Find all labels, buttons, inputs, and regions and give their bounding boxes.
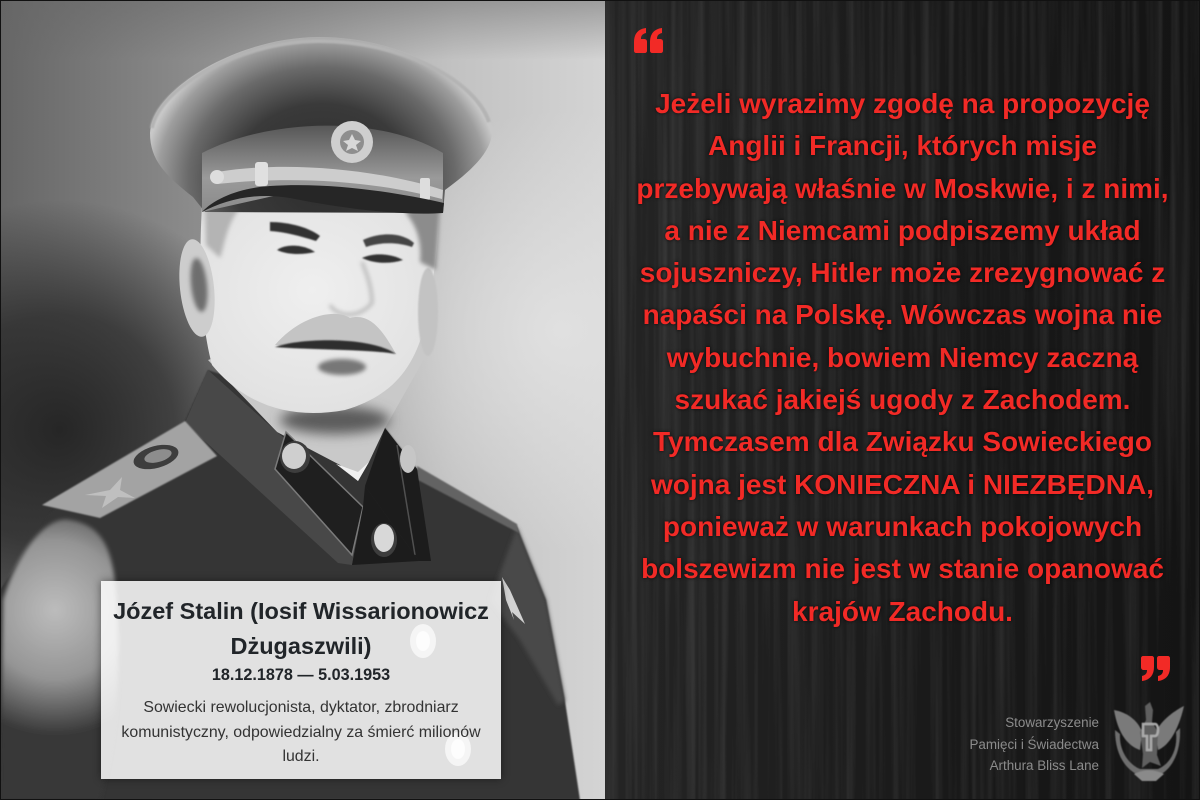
quote text: Anglii i Francji, których misje	[708, 130, 1097, 161]
card heading: name	[113, 598, 489, 659]
icon: closing quotation mark	[1141, 656, 1170, 681]
neck	[208, 330, 432, 481]
quote text: bolszewizm nie jest w stanie opanować	[641, 553, 1164, 584]
quote text: przebywają właśnie w Moskwie, i z nimi,	[636, 173, 1169, 204]
quote text: wojna jest KONIECZNA i NIEZBĘDNA,	[651, 469, 1154, 500]
quote text: szukać jakiejś ugody z Zachodem.	[675, 384, 1130, 415]
face	[175, 190, 440, 413]
coat buttons	[280, 441, 525, 766]
card description: ludzi.	[282, 748, 320, 765]
panel: portrait photograph	[1, 1, 605, 799]
epaulette	[42, 421, 217, 518]
background tone	[0, 0, 605, 800]
icon: eagle emblem	[1114, 702, 1184, 782]
quote text: a nie z Niemcami podpiszemy układ	[664, 215, 1141, 246]
quote text: wybuchnie, bowiem Niemcy zaczną	[667, 342, 1138, 373]
quote text: Jeżeli wyrazimy zgodę na propozycję	[655, 88, 1150, 119]
quote text: sojuszniczy, Hitler może zrezygnować z	[640, 257, 1165, 288]
figure coat	[0, 370, 580, 800]
quote text	[636, 88, 1169, 628]
officer cap	[150, 37, 492, 214]
card heading: name: Dżugaszwili)	[230, 633, 372, 659]
organisation name	[970, 715, 1099, 773]
card heading: name: Józef Stalin (Iosif Wissarionowicz	[113, 598, 489, 624]
icon: opening quotation mark	[634, 28, 663, 53]
card dates: 18.12.1878 — 5.03.1953	[212, 666, 390, 684]
quote text: napaści na Polskę. Wówczas wojna nie	[643, 299, 1162, 330]
card description: komunistyczny, odpowiedzialny za śmierć milionów	[121, 724, 481, 740]
organisation name: Arthura Bliss Lane	[990, 758, 1099, 773]
card description: Sowiecki rewolucjonista, dyktator, zbrodniarz	[143, 699, 459, 716]
organisation name: Pamięci i Świadectwa	[970, 736, 1099, 752]
organisation name: Stowarzyszenie	[1005, 715, 1099, 730]
caption card	[101, 581, 501, 779]
panel: dark wood background	[605, 1, 1198, 799]
quote text: ponieważ w warunkach pokojowych	[663, 511, 1142, 542]
quote text: krajów Zachodu.	[792, 596, 1013, 627]
collar	[185, 370, 431, 565]
card description	[121, 699, 481, 765]
quote text: Tymczasem dla Związku Sowieckiego	[653, 426, 1152, 457]
